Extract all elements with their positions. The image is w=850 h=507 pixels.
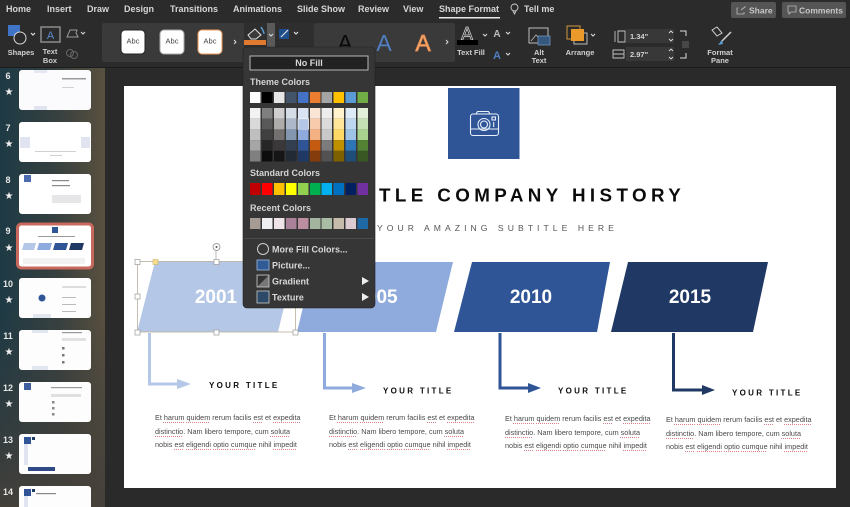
picture item: Picture... [272, 260, 310, 270]
timeline block 2015: 2015 [669, 287, 712, 308]
ribbon tabs: Review [358, 4, 390, 14]
body text 2 [329, 413, 475, 450]
arrow head 4 [702, 385, 715, 395]
body text 2: nobis est eligendi optio cumque nihil impedit [329, 440, 471, 449]
timeline block 2015 [611, 262, 768, 332]
thumbnail 7: 7 [5, 123, 11, 133]
thumbnail 9 selected [5, 224, 92, 268]
heading 1: YOUR TITLE [209, 381, 280, 390]
timeline block 2001: 2001 [195, 287, 238, 308]
word art presets: A [337, 30, 353, 56]
shapes button: Shapes [8, 48, 34, 57]
alt text button [529, 28, 550, 65]
thumbnail 8: ★ [5, 191, 14, 202]
body text 3: nobis est eligendi optio cumque nihil impedit [505, 441, 647, 450]
text fill button: Text Fill [457, 48, 485, 57]
recent color row [250, 218, 368, 229]
arrow head 3 [528, 383, 541, 393]
body text 1 [155, 413, 301, 450]
thumbnail 14 [3, 486, 91, 507]
text fill button: A [493, 50, 501, 62]
timeline block 2005 [297, 262, 453, 332]
title: TLE COMPANY HISTORY [379, 184, 685, 206]
thumbnail 14: 14 [3, 487, 13, 497]
gradient item [257, 275, 369, 287]
thumbnail 13: ★ [5, 451, 14, 462]
body text 3 [505, 414, 651, 451]
shape style presets: Abc [127, 36, 140, 46]
body text 2: Et harum quidem rerum facilis est et expedita [329, 413, 475, 422]
arrow head 2 [352, 383, 366, 393]
ribbon tabs: Draw [87, 4, 110, 14]
size fields: 2.97" [630, 50, 649, 59]
ribbon tabs [6, 4, 554, 18]
slide canvas [124, 86, 836, 488]
format pane button: Format [707, 48, 733, 57]
thumbnail 7 [5, 122, 91, 162]
heading 3: YOUR TITLE [558, 386, 629, 396]
fill color button [244, 23, 275, 47]
thumbnail 13 [3, 434, 91, 474]
thumbnail 11: 11 [3, 331, 13, 341]
thumbnail 11: ★ [5, 347, 14, 358]
ribbon tabs: Design [124, 4, 154, 14]
text box button: Box [43, 56, 58, 65]
picture item [257, 260, 310, 270]
timeline block 2010 [454, 262, 610, 332]
ribbon background [0, 0, 850, 68]
word art presets: A [415, 30, 431, 56]
size fields [613, 29, 689, 61]
body text 4 [666, 415, 812, 452]
body text 3: distinctio. Nam libero tempore, cum soluta [505, 428, 640, 436]
standard colors heading: Standard Colors [250, 168, 320, 178]
body text 1: distinctio. Nam libero tempore, cum soluta [155, 426, 290, 436]
no fill button: No Fill [295, 58, 323, 68]
ribbon tabs: Home [6, 4, 31, 14]
comments button [782, 2, 846, 18]
line color button [279, 29, 298, 39]
recent colors heading: Recent Colors [250, 203, 311, 213]
theme color shades [250, 108, 368, 162]
thumbnail 12: ★ [5, 399, 14, 410]
ribbon tabs: Shape Format [439, 4, 499, 14]
edit shape icons [66, 30, 85, 58]
arrow 4 [674, 333, 702, 390]
body text 3: Et harum quidem rerum facilis est et expedita [505, 414, 651, 423]
thumbnail 9 selected: ★ [5, 243, 14, 254]
ribbon tabs: Tell me [524, 4, 554, 14]
standard color row [250, 183, 368, 195]
theme colors heading: Theme Colors [250, 77, 310, 87]
arrow 1 [150, 333, 177, 384]
icon tile: camera [448, 88, 520, 159]
ribbon tabs: Slide Show [297, 4, 346, 14]
texture item [257, 291, 369, 303]
timeline block 2005: 2005 [355, 287, 398, 308]
icon: tell me bulb [511, 4, 518, 14]
text fill button [457, 24, 510, 62]
body text 4: distinctio. Nam libero tempore, cum soluta [666, 428, 801, 438]
timeline block 2001 [137, 262, 295, 332]
thumbnail 11 [3, 330, 91, 370]
alt text button: Alt [534, 48, 544, 57]
thumbnail 6: ★ [5, 87, 14, 98]
shapes button [8, 25, 35, 57]
thumbnail 13: 13 [3, 435, 13, 445]
text box button: Text [43, 47, 58, 56]
text box button [41, 27, 60, 65]
thumbnail 9 selected: 9 [5, 226, 11, 236]
arrow head 1 [177, 379, 191, 389]
more fill colors item: More Fill Colors... [272, 244, 348, 254]
text fill button: A [461, 24, 473, 44]
comments button: Comments [799, 6, 843, 16]
text fill button: A [493, 29, 501, 40]
size fields: 1.34" [630, 32, 649, 41]
ribbon tabs: View [403, 4, 424, 14]
subtitle: YOUR AMAZING SUBTITLE HERE [377, 223, 618, 233]
text box button: A [47, 30, 55, 42]
thumbnail 10: 10 [3, 279, 13, 289]
arrow 3 [500, 333, 528, 388]
icon: camera [470, 112, 498, 136]
thumbnail 10 [3, 278, 91, 318]
thumbnail 7: ★ [5, 139, 14, 150]
no fill button [250, 56, 368, 70]
thumbnail 6 [5, 70, 91, 110]
word art presets: A [376, 30, 392, 56]
heading 4: YOUR TITLE [732, 388, 803, 398]
arrange button: Arrange [566, 48, 594, 57]
arrange button [566, 26, 595, 57]
body text 4: nobis est eligendi optio cumque nihil impedit [666, 442, 808, 451]
share button [731, 2, 776, 18]
ribbon tabs: Insert [47, 4, 72, 14]
timeline block 2010: 2010 [510, 287, 552, 308]
format pane button [707, 27, 733, 65]
body text 1: nobis est eligendi optio cumque nihil impedit [155, 440, 297, 449]
thumbnail 6: 6 [5, 71, 11, 81]
shape style presets: Abc [204, 36, 217, 46]
format pane button: Pane [711, 56, 729, 65]
thumbnail 8 [5, 174, 91, 214]
gradient item: Gradient [272, 276, 309, 286]
thumbnail 12 [3, 382, 91, 422]
arrow 2 [324, 333, 352, 388]
body text 4: Et harum quidem rerum facilis est et expedita [666, 415, 812, 424]
selection frame around 2001 block [135, 244, 298, 335]
body text 1: Et harum quidem rerum facilis est et expedita [155, 413, 301, 422]
shape style presets [121, 30, 236, 54]
shape style presets: Abc [166, 36, 179, 46]
body text 2: distinctio. Nam libero tempore, cum soluta [329, 426, 464, 436]
theme color row [250, 92, 368, 103]
word art presets [337, 30, 448, 56]
thumbnail 12: 12 [3, 383, 13, 393]
ribbon tabs: Animations [233, 4, 282, 14]
sidebar: slide thumbnails [0, 68, 105, 507]
fill color dropdown menu [243, 47, 375, 308]
thumbnail 8: 8 [5, 175, 11, 185]
heading 2: YOUR TITLE [383, 386, 454, 396]
thumbnail 10: ★ [5, 295, 14, 306]
ribbon tabs: Transitions [170, 4, 218, 14]
texture item: Texture [272, 292, 304, 302]
alt text button: Text [532, 56, 547, 65]
share button: Share [749, 6, 773, 16]
